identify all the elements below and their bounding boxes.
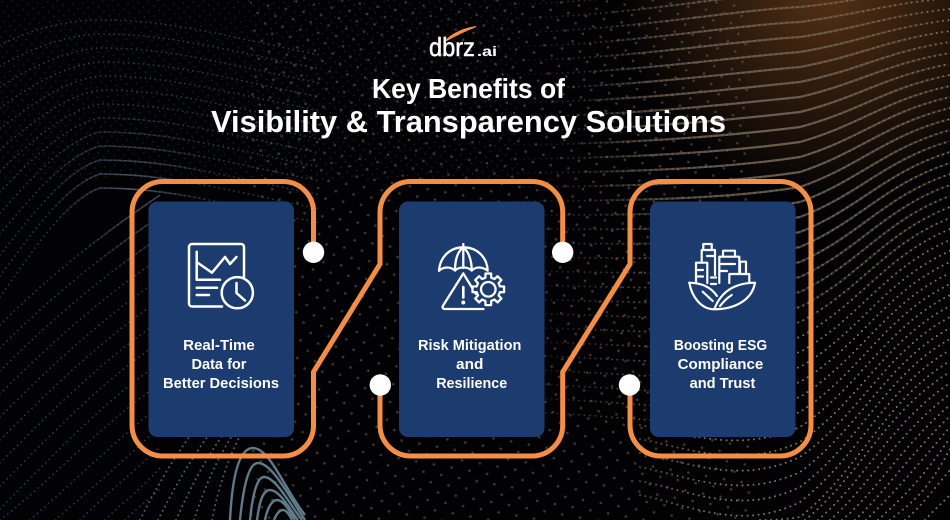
title: Key Benefits of	[372, 73, 566, 104]
title	[211, 73, 726, 139]
label: Data for	[191, 357, 247, 373]
card background	[148, 202, 294, 437]
label: Risk Mitigation	[418, 338, 521, 354]
icon: report with chart and clock	[189, 244, 253, 308]
icon: city growing from leaves	[689, 244, 755, 309]
label: Compliance	[678, 357, 763, 373]
connector: orange loop around cards two and three	[380, 182, 811, 456]
title: Visibility & Transparency Solutions	[211, 104, 726, 139]
label: and	[456, 357, 483, 373]
panel: risk mitigation	[399, 202, 544, 437]
logo: dbrz.ai: dbrz	[429, 32, 475, 62]
label: Boosting ESG	[674, 338, 767, 354]
card background	[650, 202, 796, 437]
card background	[399, 202, 544, 437]
panel: ESG compliance	[650, 202, 796, 437]
label: Real-Time	[183, 338, 255, 354]
logo: dbrz.ai: .ai	[477, 43, 497, 59]
connector: orange loop around cards one and two	[132, 182, 563, 456]
panel: real-time data	[148, 202, 294, 437]
icon: umbrella, warning triangle and gear	[439, 244, 504, 309]
connector nodes: white circles	[303, 242, 640, 396]
logo: dbrz.ai	[429, 26, 497, 62]
label: Better Decisions	[163, 376, 279, 392]
label: Resilience	[436, 376, 507, 392]
label: and Trust	[690, 376, 756, 392]
